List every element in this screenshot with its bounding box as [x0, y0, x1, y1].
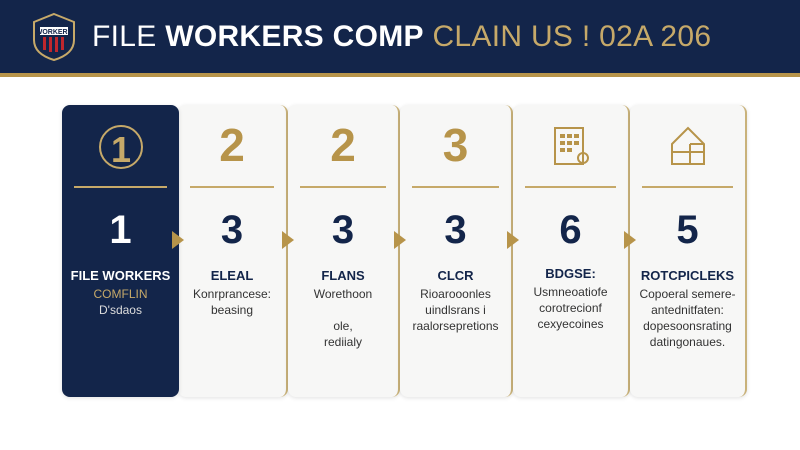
arrow 2: [282, 231, 294, 249]
panel: step 6: antednitfaten:: [651, 303, 724, 317]
panel: step 5: [513, 105, 630, 397]
panel: step 3: Worethoon: [314, 287, 372, 301]
panel: step 5: corotrecionf: [539, 301, 602, 315]
panel: step 6: dopesoonsrating: [643, 319, 732, 333]
panel: step 3: FLANS: [321, 268, 365, 283]
icon: house: [671, 126, 705, 165]
panel: step 2: ELEAL: [211, 268, 253, 283]
panel: step 6: ROTCPICLEKS: [641, 268, 734, 283]
header bar: [0, 0, 800, 73]
arrow 1: [172, 231, 184, 249]
panel: step 3: rediialy: [324, 335, 362, 349]
panel: step 4: [400, 105, 513, 397]
panel: step 2: [178, 105, 288, 397]
panel: step 6: datingonaues.: [650, 335, 725, 349]
arrow 4: [507, 231, 519, 249]
panel: step 6: Copoeral semere-: [639, 287, 736, 301]
panel: step 4: CLCR: [437, 268, 474, 283]
panel: step 3: [288, 105, 400, 397]
arrow 3: [394, 231, 406, 249]
panel: step 3: 2: [330, 119, 356, 171]
icon: circled 1: 1: [110, 129, 131, 170]
panel: step 2: 2: [219, 119, 245, 171]
panel: step 6: [630, 105, 747, 397]
panel: step 5: 6: [559, 208, 582, 252]
arrow 5: [624, 231, 636, 249]
panel: step 2: Konrprancese:: [193, 287, 271, 301]
panel: step 5: BDGSE:: [545, 266, 596, 281]
panel: step 4: uindlsrans i: [425, 303, 486, 317]
icon: badge logo: WORKERS: [36, 29, 73, 36]
panel: step 1: D'sdaos: [99, 303, 142, 317]
panel: step 3: 3: [332, 208, 354, 252]
panel: step 3: ole,: [333, 319, 353, 333]
icon: badge logo: [33, 12, 75, 61]
panel: step 2: beasing: [211, 303, 253, 317]
panel: step 1: 1: [109, 208, 132, 252]
panel: step 1: FILE WORKERS: [71, 268, 170, 283]
panel: step 1: COMFLIN: [94, 287, 148, 301]
panel: step 4: 3: [444, 208, 467, 252]
panel: step 4: raalorsepretions: [412, 319, 499, 333]
gold rule: [0, 73, 800, 77]
panel: step 5: Usmneoatiofe: [533, 285, 608, 299]
icon: circled 1: [99, 125, 143, 170]
icon: calendar: [554, 127, 589, 165]
panel: step 4: 3: [443, 119, 468, 171]
title: FILE WORKERS COMP CLAIN US ! 02A 206: [92, 20, 711, 53]
panel: step 1: [62, 105, 179, 397]
panel: step 5: cexyecoines: [537, 317, 604, 331]
panel: step 6: 5: [676, 208, 699, 252]
panel: step 4: Rioarooonles: [420, 287, 491, 301]
panel: step 2: 3: [221, 208, 243, 252]
